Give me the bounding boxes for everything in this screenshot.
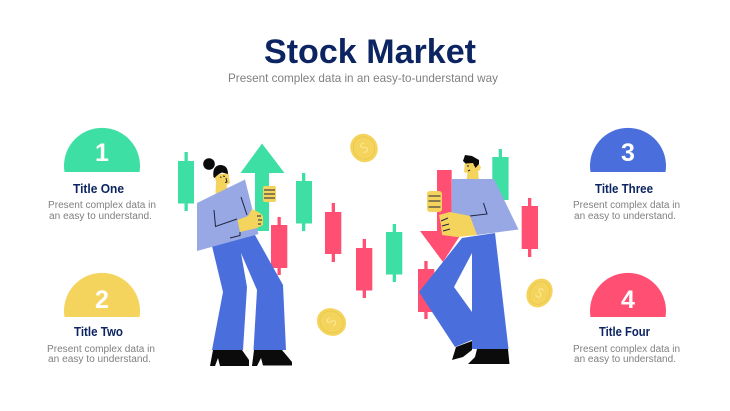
heading: title one: Title One	[73, 181, 124, 196]
title: Stock Market	[264, 33, 476, 71]
candle red 5	[356, 239, 372, 298]
candle green 3	[296, 173, 312, 231]
description: title two: an easy to understand.	[48, 354, 151, 365]
candle red 2	[271, 217, 287, 275]
heading: title three: Title Three	[595, 181, 653, 196]
description: title four	[573, 344, 680, 365]
panel: title three	[573, 128, 680, 222]
badge 1: 1	[95, 139, 109, 167]
description: title three: Present complex data in	[573, 200, 680, 211]
panel: title four	[573, 273, 680, 365]
shirt	[452, 179, 518, 236]
description: title four: an easy to understand.	[574, 354, 676, 365]
candle red 7	[418, 261, 434, 319]
hair	[203, 158, 228, 178]
trousers	[212, 235, 286, 350]
candle red 4	[325, 203, 341, 262]
trousers	[419, 233, 508, 349]
badge 3: 3	[621, 139, 635, 167]
hand on arrow	[238, 209, 263, 232]
description: title two: Present complex data in	[47, 344, 155, 355]
description: title three: an easy to understand.	[574, 211, 676, 222]
description: title two	[47, 344, 155, 365]
head	[214, 174, 230, 194]
hair	[463, 155, 479, 168]
head	[464, 162, 481, 180]
panel: title two	[47, 273, 155, 365]
icon: green up arrow	[240, 144, 284, 231]
shoes	[210, 350, 292, 366]
heading: title four: Title Four	[599, 324, 650, 339]
description: title one: Present complex data in	[48, 200, 156, 211]
candle green 6	[386, 224, 402, 282]
badge 4: 4	[621, 286, 635, 314]
candle green 1	[178, 152, 194, 211]
candle red 9	[522, 198, 538, 257]
subtitle: Present complex data in an easy-to-understand way	[228, 71, 498, 85]
candlestick chart	[178, 149, 538, 319]
shirt	[197, 180, 258, 251]
figure: woman holding up arrow	[197, 158, 292, 366]
description: title four: Present complex data in	[573, 344, 680, 355]
badge 2: 2	[95, 286, 109, 314]
description: title three	[573, 200, 680, 222]
icon: coin top	[345, 129, 383, 167]
upper hand	[263, 186, 276, 202]
shoes	[452, 341, 510, 364]
description: title one: an easy to understand.	[49, 211, 152, 222]
icon: coin bottom left	[312, 303, 351, 341]
upper hand	[427, 191, 442, 212]
figure: man holding down arrow	[419, 155, 518, 364]
panel: title one	[48, 128, 156, 222]
candle green 8	[492, 149, 509, 200]
description: title one	[48, 200, 156, 222]
heading: title two: Title Two	[74, 324, 123, 339]
icon: red down arrow	[420, 170, 463, 262]
icon: coin right	[521, 274, 558, 312]
lower hand	[439, 212, 477, 237]
